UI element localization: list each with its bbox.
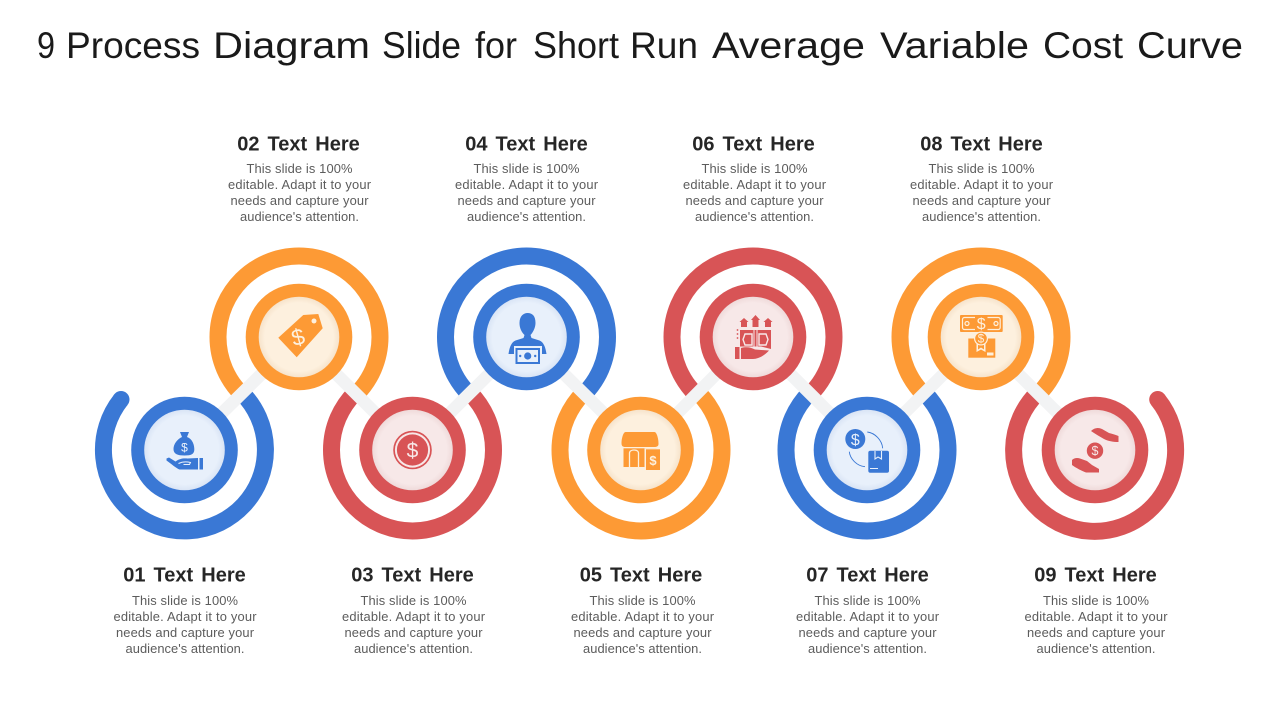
- step 5 badge: [587, 397, 694, 503]
- text block: 08: editable. Adapt it to your: [910, 177, 1054, 192]
- text block: 02: audience's attention.: [240, 209, 359, 224]
- icon: dollar coin: $: [407, 440, 419, 462]
- text block: 08: 08 Text Here: [920, 134, 1043, 156]
- icon: hand with money and up arrows: [735, 315, 772, 360]
- text block: 07: [796, 564, 940, 656]
- title: [37, 25, 1243, 66]
- text block: 09: 09 Text Here: [1034, 564, 1157, 586]
- text block: 09: editable. Adapt it to your: [1024, 609, 1168, 624]
- text block: 03: 03 Text Here: [351, 564, 474, 586]
- outer arc: step 5: [560, 393, 722, 531]
- text block: 02: 02 Text Here: [237, 134, 360, 156]
- text block: 07: needs and capture your: [798, 625, 937, 640]
- text block: 07: This slide is 100%: [814, 593, 920, 608]
- title: Cost: [1043, 25, 1124, 66]
- title: Run: [630, 25, 698, 66]
- text block: 01: needs and capture your: [116, 625, 255, 640]
- text block: 08: needs and capture your: [912, 193, 1051, 208]
- title: Short: [533, 25, 620, 66]
- text block: 04: This slide is 100%: [474, 161, 580, 176]
- outer arc: step 6: [672, 256, 834, 394]
- text block: 05: [571, 564, 715, 656]
- icon: two hands around coin: $: [1092, 444, 1099, 458]
- outer arc: step 7: [786, 393, 948, 531]
- step 8 badge: [928, 284, 1034, 390]
- text block: 05: This slide is 100%: [590, 593, 696, 608]
- outer arc: step 1: [103, 391, 265, 531]
- text block: 01: This slide is 100%: [132, 593, 238, 608]
- text block: 09: [1024, 564, 1168, 656]
- step 1 badge: [131, 397, 238, 503]
- text block: 08: This slide is 100%: [928, 161, 1034, 176]
- step 4 badge: [473, 284, 580, 390]
- icon: banknote and parcel with medal: $: [978, 334, 985, 346]
- text block: 05: audience's attention.: [583, 641, 702, 656]
- icon: shop with price tag: $: [649, 453, 657, 468]
- step 2 badge: [246, 284, 352, 390]
- text block: 01: 01 Text Here: [123, 564, 246, 586]
- step 9 badge: [1042, 397, 1148, 503]
- text block: 02: [228, 134, 372, 224]
- outer arc: step 4: [445, 256, 608, 394]
- icon: coin exchanged for parcel: $: [851, 432, 860, 449]
- text block: 07: 07 Text Here: [806, 564, 929, 586]
- connectors between steps: [184, 337, 1095, 450]
- text block: 04: needs and capture your: [458, 193, 596, 208]
- title: Curve: [1137, 25, 1243, 66]
- text block: 04: editable. Adapt it to your: [455, 177, 599, 192]
- title: Slide: [382, 25, 461, 66]
- step 6 badge: [700, 284, 806, 390]
- icon: banknote and parcel with medal: $: [977, 316, 986, 333]
- icon: price tag: $: [288, 323, 308, 351]
- text block: 01: editable. Adapt it to your: [114, 609, 257, 624]
- text block: 03: [342, 564, 486, 656]
- title: Process: [66, 25, 200, 66]
- text block: 02: This slide is 100%: [246, 161, 352, 176]
- text block: 05: 05 Text Here: [580, 564, 702, 586]
- text block: 06: This slide is 100%: [702, 161, 808, 176]
- step 7 badge: [814, 397, 920, 503]
- text block: 07: editable. Adapt it to your: [796, 609, 940, 624]
- text block: 06: editable. Adapt it to your: [683, 177, 827, 192]
- text block: 06: [683, 134, 827, 224]
- text block: 07: audience's attention.: [808, 641, 927, 656]
- text block: 05: editable. Adapt it to your: [571, 609, 715, 624]
- text block: 03: audience's attention.: [354, 641, 473, 656]
- text block: 06: needs and capture your: [686, 193, 824, 208]
- text block: 06: audience's attention.: [695, 209, 814, 224]
- text block: 03: This slide is 100%: [360, 593, 466, 608]
- text block: 09: needs and capture your: [1027, 625, 1166, 640]
- text block: 03: editable. Adapt it to your: [342, 609, 486, 624]
- text block: 04: 04 Text Here: [465, 134, 588, 156]
- text block: 08: [910, 134, 1054, 224]
- text block: 03: needs and capture your: [344, 625, 483, 640]
- text block: 01: audience's attention.: [126, 641, 244, 656]
- text block: 06: 06 Text Here: [692, 134, 815, 156]
- text block: 05: needs and capture your: [574, 625, 712, 640]
- outer arc: step 9: [1014, 391, 1176, 531]
- text block: 01: [114, 564, 257, 656]
- icon: money bag on hand: $: [181, 440, 188, 454]
- text block: 02: needs and capture your: [230, 193, 369, 208]
- text block: 04: [455, 134, 599, 224]
- icon: banknote and parcel with medal: [960, 315, 1003, 358]
- outer arc: step 8: [900, 256, 1062, 394]
- title: Diagram: [213, 25, 370, 66]
- outer arc: step 3: [332, 393, 493, 531]
- text block: 09: audience's attention.: [1036, 641, 1156, 656]
- title: Variable: [880, 25, 1029, 66]
- title: Average: [712, 25, 865, 66]
- step 3 badge: [359, 397, 466, 503]
- title: for: [475, 25, 517, 66]
- text block: 08: audience's attention.: [922, 209, 1041, 224]
- text block: 04: audience's attention.: [467, 209, 586, 224]
- text block: 09: This slide is 100%: [1043, 593, 1149, 608]
- icon: person holding banknote: [508, 313, 546, 366]
- outer arc: step 2: [218, 256, 380, 394]
- text block: 02: editable. Adapt it to your: [228, 177, 372, 192]
- title: 9: [37, 25, 55, 66]
